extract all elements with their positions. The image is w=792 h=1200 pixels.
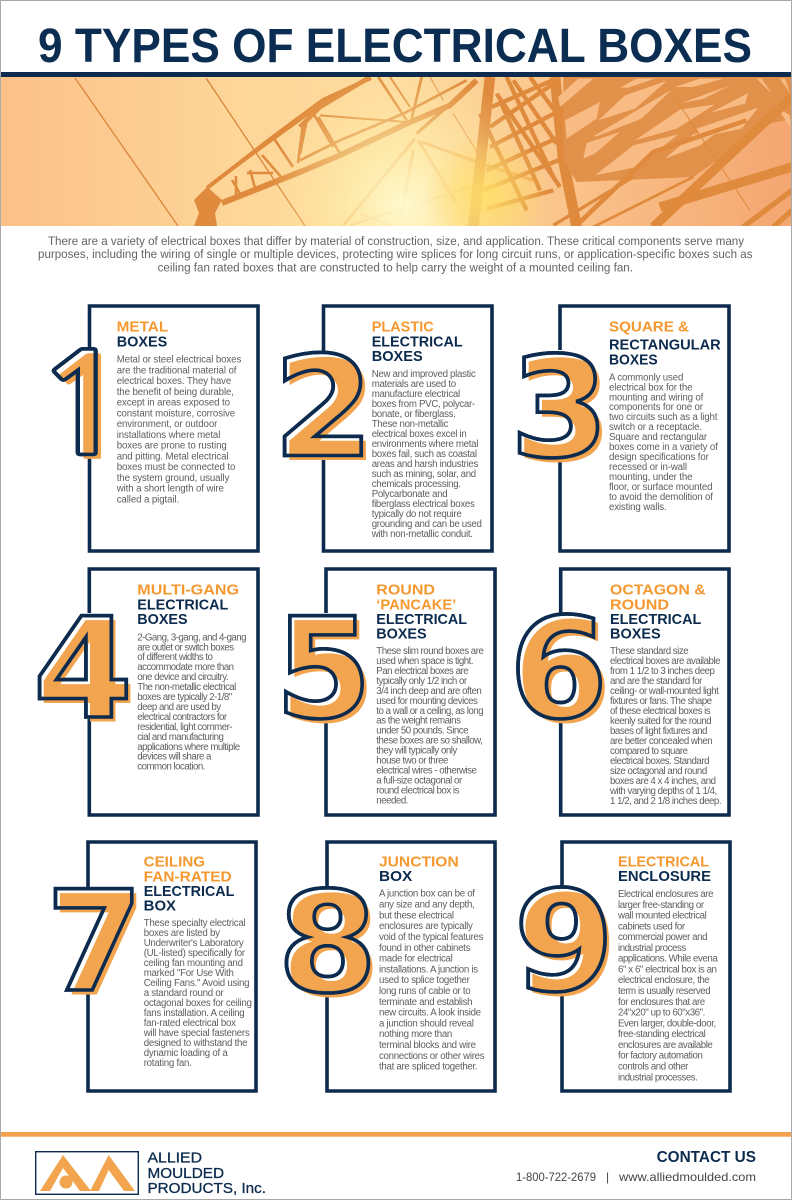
text: square and rectangular boxes: to avoid the demolition of bbox=[609, 492, 713, 503]
heading: ceiling fan-rated electrical box: BOX bbox=[144, 899, 176, 915]
text: octagon and round electrical boxes: bases of light fixtures and bbox=[610, 726, 707, 737]
heading: junction box: BOX bbox=[379, 869, 413, 885]
text: electrical enclosure: wall mounted electrical bbox=[617, 911, 707, 922]
text: octagon and round electrical boxes: compared to square bbox=[610, 746, 688, 757]
logo wordmark: MOULDED bbox=[148, 1166, 224, 1182]
number 2: 2 bbox=[273, 327, 374, 489]
number 3: 3 bbox=[510, 328, 609, 490]
text: junction box: new circuits. A look inside bbox=[379, 1008, 481, 1019]
heading: junction box: JUNCTION bbox=[379, 855, 459, 871]
text: octagon and round electrical boxes: of these electrical boxes is bbox=[610, 706, 711, 717]
text: electrical enclosure: for factory automation bbox=[618, 1051, 702, 1062]
text: octagon and round electrical boxes: electrical boxes. Standard bbox=[610, 756, 709, 767]
text: round pancake electrical boxes: used for mounting devices bbox=[376, 696, 478, 707]
heading: metal boxes: BOXES bbox=[117, 334, 167, 350]
heading: octagon and round electrical boxes: ROUND bbox=[610, 597, 669, 613]
number 6: 6 bbox=[509, 589, 608, 751]
text: round pancake electrical boxes: round electrical box is bbox=[376, 785, 460, 796]
text: plastic electrical boxes: fiberglass electrical boxes bbox=[372, 499, 475, 510]
heading: ceiling fan-rated electrical box: CEILING bbox=[144, 855, 205, 871]
text: metal boxes: the system ground, usually bbox=[117, 473, 230, 484]
text: metal boxes: with a short length of wire bbox=[116, 484, 224, 495]
text: multi-gang electrical boxes: are outlet or switch boxes bbox=[137, 642, 234, 653]
number 7: 7 bbox=[51, 866, 147, 1028]
text: plastic electrical boxes: These non-metallic bbox=[372, 419, 449, 430]
hero photo: transmission tower at sunset bbox=[1, 77, 792, 227]
number 8: 8 bbox=[278, 863, 377, 1024]
text: electrical enclosure: applications. While evena bbox=[618, 954, 718, 965]
text: octagon and round electrical boxes: boxes are 4 x 4 inches, and bbox=[610, 776, 716, 787]
text: square and rectangular boxes: design specifications for bbox=[609, 452, 710, 463]
text: metal boxes: and pitting. Metal electrical bbox=[117, 451, 228, 462]
text: electrical enclosure: controls and other bbox=[618, 1061, 689, 1072]
text: round pancake electrical boxes: a full-size octagonal or bbox=[376, 775, 463, 786]
logo wordmark bbox=[148, 1151, 266, 1197]
text: ceiling fan-rated electrical box: Underwriter's Laboratory bbox=[144, 938, 244, 949]
text: multi-gang electrical boxes: electrical contractors for bbox=[137, 712, 228, 723]
text: plastic electrical boxes: materials are used to bbox=[372, 379, 456, 390]
text: square and rectangular boxes: mounting, under the bbox=[609, 472, 692, 483]
heading: octagon and round electrical boxes: BOXES bbox=[610, 627, 661, 643]
text: junction box: terminal blocks and wire bbox=[379, 1040, 476, 1051]
heading: plastic electrical boxes: ELECTRICAL bbox=[372, 334, 463, 350]
text: multi-gang electrical boxes: cial and manufacturing bbox=[137, 732, 223, 743]
text: junction box: but these electrical bbox=[379, 910, 454, 921]
text: octagon and round electrical boxes: with varying depths of 1 1/4, bbox=[609, 786, 717, 797]
text: multi-gang electrical boxes: accommodate more than bbox=[137, 662, 234, 673]
panel 2: plastic electrical boxes bbox=[273, 306, 492, 551]
intro paragraph: There are a variety of electrical boxes that differ by material of construction, size, and application. These critical components serve many bbox=[48, 234, 745, 248]
text: metal boxes: electrical boxes. They have bbox=[117, 376, 231, 387]
number 3: 3 bbox=[510, 328, 609, 490]
text: multi-gang electrical boxes: applications where multiple bbox=[137, 742, 240, 753]
heading: multi-gang electrical boxes bbox=[137, 583, 239, 628]
intro paragraph: purposes, including the wiring of single or multiple devices, protecting wire splices for long circuit runs, or application-specific boxes such as bbox=[38, 247, 752, 261]
number 9: 9 bbox=[514, 862, 614, 1023]
text: plastic electrical boxes: areas and harsh industries bbox=[372, 459, 479, 470]
text: square and rectangular boxes: boxes come in a variety of bbox=[609, 442, 718, 453]
text: octagon and round electrical boxes: keenly suited for the round bbox=[610, 716, 711, 727]
text: octagon and round electrical boxes: are better concealed when bbox=[610, 736, 712, 747]
heading: square and rectangular boxes bbox=[609, 320, 721, 368]
contact block: 1-800-722-2679 bbox=[516, 1170, 596, 1184]
text: square and rectangular boxes: mounting and wiring of bbox=[609, 392, 704, 403]
contact block: CONTACT US bbox=[657, 1149, 756, 1166]
text: multi-gang electrical boxes: boxes are typically 2-1/8" bbox=[137, 692, 233, 703]
panel 1: metal boxes bbox=[32, 306, 258, 551]
text: square and rectangular boxes: electrical box for the bbox=[609, 382, 692, 393]
text: ceiling fan-rated electrical box: fan-rated electrical box bbox=[144, 1018, 236, 1029]
heading: round pancake electrical boxes: ELECTRICAL bbox=[376, 612, 467, 628]
heading: round pancake electrical boxes bbox=[376, 583, 467, 643]
text: junction box: terminate and establish bbox=[379, 997, 472, 1008]
text: metal boxes: boxes are prone to rusting bbox=[117, 441, 227, 452]
intro paragraph: ceiling fan rated boxes that are constructed to help carry the weight of a mounted ceiling fan. bbox=[158, 260, 633, 274]
text: multi-gang electrical boxes: of different widths to bbox=[137, 652, 213, 663]
number 9: 9 bbox=[514, 862, 614, 1023]
text: junction box: void of the typical features bbox=[379, 932, 484, 943]
number 8: 8 bbox=[278, 863, 377, 1024]
text: ceiling fan-rated electrical box: designed to withstand the bbox=[144, 1038, 247, 1049]
number 3: 3 bbox=[515, 333, 613, 494]
panel 9: electrical enclosure bbox=[514, 842, 730, 1091]
panel 3: square and rectangular boxes bbox=[510, 306, 729, 551]
text: ceiling fan-rated electrical box: fans installation. A ceiling bbox=[144, 1008, 244, 1019]
text: multi-gang electrical boxes: common location. bbox=[137, 762, 205, 773]
text: octagon and round electrical boxes: fixtures or fans. The shape bbox=[610, 696, 712, 707]
text: electrical enclosure: 6" x 6" electrical box is an bbox=[618, 964, 717, 975]
number 6: 6 bbox=[509, 589, 608, 751]
text: plastic electrical boxes: grounding and can be used bbox=[372, 519, 482, 530]
panel 7: ceiling fan-rated electrical box bbox=[46, 842, 256, 1091]
text: round pancake electrical boxes: electrical wires - otherwise bbox=[376, 766, 477, 777]
text: round pancake electrical boxes: needed. bbox=[376, 795, 408, 806]
text: ceiling fan-rated electrical box: Ceiling Fans." Avoid using bbox=[144, 978, 249, 989]
text: octagon and round electrical boxes: These standard size bbox=[610, 646, 688, 657]
logo: allied moulded products bbox=[36, 1151, 266, 1197]
heading: plastic electrical boxes bbox=[372, 320, 463, 365]
number 2: 2 bbox=[273, 327, 374, 489]
text: multi-gang electrical boxes: one device and circuitry. bbox=[137, 672, 228, 683]
text: octagon and round electrical boxes: 1 1/2, and 2 1/8 inches deep. bbox=[610, 796, 721, 807]
heading: multi-gang electrical boxes: MULTI-GANG bbox=[137, 583, 239, 599]
text: round pancake electrical boxes: used when space is tight. bbox=[376, 656, 473, 667]
icon: orange AM mark bbox=[40, 1155, 135, 1191]
contact block: | bbox=[606, 1170, 609, 1184]
text: round pancake electrical boxes: as the weight remains bbox=[376, 716, 461, 727]
heading: multi-gang electrical boxes: ELECTRICAL bbox=[137, 597, 228, 613]
text: square and rectangular boxes: switch or a receptacle. bbox=[609, 422, 702, 433]
footer rule bbox=[1, 1132, 791, 1137]
heading: square and rectangular boxes: RECTANGULAR bbox=[609, 338, 721, 354]
panel 4: multi-gang electrical boxes bbox=[33, 569, 258, 815]
text: square and rectangular boxes: two circuits such as a light bbox=[609, 412, 718, 423]
number 9: 9 bbox=[518, 866, 618, 1028]
text: electrical enclosure: cabinets used for bbox=[618, 921, 686, 932]
text: electrical enclosure: 24"x20" up to 60"x36". bbox=[618, 1008, 705, 1019]
text: ceiling fan-rated electrical box: a standard round or bbox=[144, 988, 225, 999]
text: plastic electrical boxes: New and improved plastic bbox=[372, 369, 476, 380]
contact block: www.alliedmoulded.com bbox=[618, 1170, 756, 1184]
text: square and rectangular boxes: A commonly used bbox=[609, 372, 683, 383]
panel 8: junction box bbox=[278, 842, 495, 1091]
text: round pancake electrical boxes: These slim round boxes are bbox=[376, 646, 483, 657]
text: round pancake electrical boxes: they will typically only bbox=[376, 746, 457, 757]
number 5: 5 bbox=[275, 588, 372, 750]
text: square and rectangular boxes: floor, or surface mounted bbox=[609, 482, 712, 493]
heading: octagon and round electrical boxes bbox=[610, 583, 706, 643]
text: plastic electrical boxes: Polycarbonate and bbox=[372, 489, 447, 500]
text: round pancake electrical boxes: house two or three bbox=[376, 756, 448, 767]
text: square and rectangular boxes: components for one or bbox=[609, 402, 704, 413]
text: electrical enclosure: Even larger, double-door, bbox=[618, 1018, 716, 1029]
text: electrical enclosure: Electrical enclosures are bbox=[618, 889, 713, 900]
text: metal boxes: called a pigtail. bbox=[117, 494, 179, 505]
heading: ceiling fan-rated electrical box: ELECTRICAL bbox=[144, 884, 234, 900]
heading: octagon and round electrical boxes: OCTAGON & bbox=[610, 583, 706, 599]
text: octagon and round electrical boxes: electrical boxes are available bbox=[610, 656, 720, 667]
text: electrical enclosure: electrical enclosure, the bbox=[618, 975, 709, 986]
text: multi-gang electrical boxes: devices will share a bbox=[137, 752, 212, 763]
text: ceiling fan-rated electrical box: (UL-listed) specifically for bbox=[144, 948, 246, 959]
number 1: 1 bbox=[38, 342, 139, 479]
text: electrical enclosure: industrial processes. bbox=[618, 1072, 697, 1083]
text: metal boxes: Metal or steel electrical boxes bbox=[117, 355, 241, 366]
text: round pancake electrical boxes: typically only 1/2 inch or bbox=[376, 676, 468, 687]
heading: round pancake electrical boxes: ‘PANCAKE’ bbox=[376, 597, 456, 613]
text: round pancake electrical boxes: under 50 pounds. Since bbox=[376, 726, 468, 737]
text: ceiling fan-rated electrical box: marked "For Use With bbox=[144, 968, 234, 979]
text: electrical enclosure: enclosures are available bbox=[618, 1040, 712, 1051]
text: metal boxes: installations where metal bbox=[117, 430, 220, 441]
text: multi-gang electrical boxes: 2-Gang, 3-gang, and 4-gang bbox=[137, 632, 246, 643]
text: electrical enclosure: free-standing electrical bbox=[618, 1029, 706, 1040]
number 2: 2 bbox=[278, 332, 378, 493]
heading: round pancake electrical boxes: ROUND bbox=[376, 583, 435, 599]
heading: ceiling fan-rated electrical box: FAN-RATED bbox=[144, 869, 232, 885]
heading: electrical enclosure: ELECTRICAL bbox=[618, 855, 709, 871]
intro paragraph bbox=[38, 234, 752, 274]
text: ceiling fan-rated electrical box: boxes are listed by bbox=[144, 928, 220, 939]
text: metal boxes: the benefit of being durable, bbox=[117, 387, 234, 398]
text: junction box: connections or other wires bbox=[379, 1051, 485, 1062]
text: plastic electrical boxes: chemicals processing. bbox=[372, 479, 461, 490]
logo wordmark: PRODUCTS, Inc. bbox=[148, 1181, 266, 1197]
text: round pancake electrical boxes: 3/4 inch deep and are often bbox=[376, 686, 481, 697]
text: square and rectangular boxes: recessed or in-wall bbox=[609, 462, 687, 473]
text: plastic electrical boxes: such as mining, solar, and bbox=[372, 469, 476, 480]
text: square and rectangular boxes: Square and rectangular bbox=[609, 432, 708, 443]
text: metal boxes: constant moisture, corrosive bbox=[117, 408, 235, 419]
text: junction box: found in other cabinets bbox=[379, 943, 471, 954]
heading: electrical enclosure: ENCLOSURE bbox=[618, 869, 711, 885]
number 7: 7 bbox=[46, 861, 143, 1023]
text: junction box: made for electrical bbox=[379, 954, 453, 965]
logo wordmark: ALLIED bbox=[148, 1151, 202, 1167]
text: electrical enclosure: for enclosures that are bbox=[618, 997, 705, 1008]
text: ceiling fan-rated electrical box: octagonal boxes for ceiling bbox=[144, 998, 252, 1009]
text: junction box: any size and any depth, bbox=[379, 900, 474, 911]
number 8: 8 bbox=[282, 867, 381, 1029]
number 7: 7 bbox=[46, 861, 143, 1023]
text: ceiling fan-rated electrical box: will have special fasteners bbox=[143, 1028, 250, 1039]
number 4: 4 bbox=[37, 593, 137, 755]
text: ceiling fan-rated electrical box: These specialty electrical bbox=[144, 918, 246, 929]
heading: multi-gang electrical boxes: BOXES bbox=[137, 612, 188, 628]
text: plastic electrical boxes: environments where metal bbox=[372, 439, 478, 450]
text: junction box: A junction box can be of bbox=[379, 889, 475, 900]
text: metal boxes: are the traditional material of bbox=[117, 365, 237, 376]
heading: metal boxes: METAL bbox=[117, 320, 168, 336]
text: round pancake electrical boxes: Pan electrical boxes are bbox=[376, 666, 468, 677]
heading: round pancake electrical boxes: BOXES bbox=[376, 627, 427, 643]
contact block bbox=[516, 1149, 756, 1184]
text: plastic electrical boxes: bonate, or fiberglass. bbox=[372, 409, 456, 420]
text: plastic electrical boxes: with non-metallic conduit. bbox=[371, 529, 473, 540]
number 5: 5 bbox=[275, 588, 372, 750]
text: metal boxes: environment, or outdoor bbox=[117, 419, 218, 430]
text: round pancake electrical boxes: these boxes are so shallow, bbox=[376, 736, 482, 747]
text: electrical enclosure: commercial power and bbox=[618, 932, 707, 943]
number 4: 4 bbox=[33, 589, 133, 750]
text: octagon and round electrical boxes: ceiling- or wall-mounted light bbox=[610, 686, 719, 697]
title: 9 TYPES OF ELECTRICAL BOXES bbox=[38, 20, 752, 73]
heading: ceiling fan-rated electrical box bbox=[144, 855, 234, 915]
number 4: 4 bbox=[33, 589, 133, 750]
text: junction box: enclosures are typically bbox=[379, 921, 473, 932]
text: ceiling fan-rated electrical box: ceiling fan mounting and bbox=[144, 958, 243, 969]
text: plastic electrical boxes: boxes from PVC, polycar- bbox=[372, 399, 475, 410]
number 1: 1 bbox=[32, 337, 134, 475]
text: electrical enclosure: term is usually reserved bbox=[618, 986, 710, 997]
heading: junction box bbox=[379, 855, 459, 885]
heading: electrical enclosure bbox=[618, 855, 711, 885]
number 1: 1 bbox=[32, 337, 134, 475]
text: plastic electrical boxes: boxes fail, such as coastal bbox=[372, 449, 477, 460]
title underline bbox=[1, 72, 791, 77]
text: plastic electrical boxes: manufacture electrical bbox=[372, 389, 460, 400]
text: electrical enclosure: industrial process bbox=[618, 943, 686, 954]
text: multi-gang electrical boxes: residential, light commer- bbox=[137, 722, 232, 733]
text: plastic electrical boxes: typically do not require bbox=[372, 509, 461, 520]
text: plastic electrical boxes: electrical boxes excel in bbox=[372, 429, 467, 440]
heading: plastic electrical boxes: PLASTIC bbox=[372, 320, 434, 336]
heading: square and rectangular boxes: SQUARE & bbox=[609, 320, 689, 336]
text: multi-gang electrical boxes: The non-metallic electrical bbox=[137, 682, 236, 693]
text: metal boxes: boxes must be connected to bbox=[117, 462, 235, 473]
text: junction box: used to splice together bbox=[379, 975, 471, 986]
text: junction box: that are spliced together. bbox=[379, 1062, 477, 1073]
number 6: 6 bbox=[514, 594, 612, 755]
number 5: 5 bbox=[280, 592, 376, 754]
panel 6: octagon and round electrical boxes bbox=[509, 569, 729, 815]
text: ceiling fan-rated electrical box: rotating fan. bbox=[144, 1058, 192, 1069]
text: round pancake electrical boxes: to a wall or a ceiling, as long bbox=[376, 706, 483, 717]
text: electrical enclosure: larger free-standing or bbox=[618, 900, 705, 911]
heading: plastic electrical boxes: BOXES bbox=[372, 349, 423, 365]
text: junction box: long runs of cable or to bbox=[379, 986, 470, 997]
text: octagon and round electrical boxes: size octagonal and round bbox=[610, 766, 707, 777]
panel 5: round pancake electrical boxes bbox=[275, 569, 495, 815]
text: ceiling fan-rated electrical box: dynamic loading of a bbox=[144, 1048, 228, 1059]
text: octagon and round electrical boxes: and are the standard for bbox=[610, 676, 703, 687]
text: junction box: nothing more than bbox=[379, 1029, 452, 1040]
heading: octagon and round electrical boxes: ELECTRICAL bbox=[610, 612, 701, 628]
heading: metal boxes bbox=[117, 320, 168, 350]
text: multi-gang electrical boxes: deep and are used by bbox=[137, 702, 221, 713]
text: square and rectangular boxes: existing walls. bbox=[609, 502, 667, 513]
text: junction box: installations. A junction is bbox=[379, 964, 478, 975]
text: octagon and round electrical boxes: from 1 1/2 to 3 inches deep bbox=[610, 666, 715, 677]
text: metal boxes: except in areas exposed to bbox=[117, 398, 230, 409]
text: junction box: a junction should reveal bbox=[379, 1018, 474, 1029]
heading: square and rectangular boxes: BOXES bbox=[609, 352, 658, 368]
